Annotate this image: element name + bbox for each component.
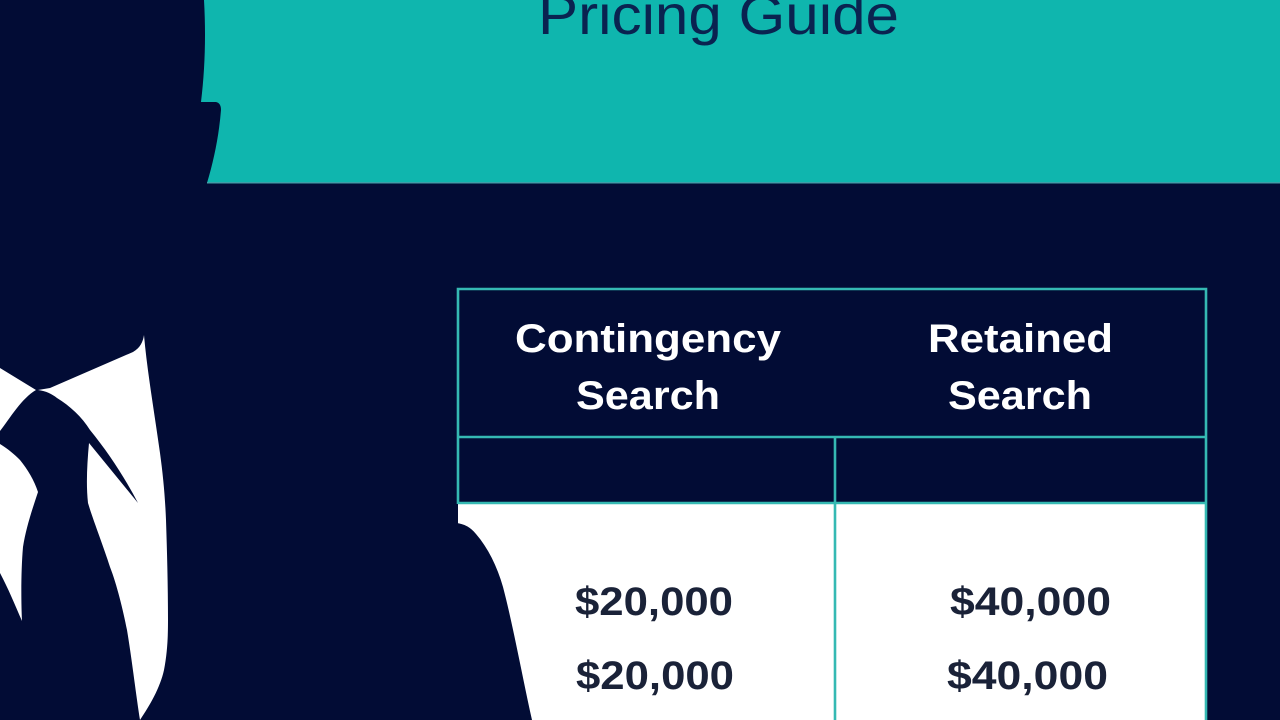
silhouette shoulder over table xyxy=(440,523,532,720)
retained prices xyxy=(947,580,1111,698)
retained prices: $40,000 xyxy=(950,580,1111,624)
businessman shirt and tie xyxy=(0,335,168,720)
shirt right side xyxy=(38,335,168,720)
column header: contingency search xyxy=(515,317,782,418)
column header: contingency search: Search xyxy=(576,374,720,418)
pricing table xyxy=(458,289,1206,720)
table body white cells xyxy=(458,504,1206,720)
contingency prices: $20,000 xyxy=(576,654,734,698)
contingency prices xyxy=(575,580,734,698)
contingency prices: $20,000 xyxy=(575,580,733,624)
column header: contingency search: Contingency xyxy=(515,317,782,361)
header band xyxy=(201,0,1280,184)
shirt left side xyxy=(0,444,38,621)
column header: retained search: Retained xyxy=(928,317,1113,361)
column header: retained search: Search xyxy=(948,374,1092,418)
retained prices: $40,000 xyxy=(947,654,1108,698)
table grid lines xyxy=(458,289,1206,720)
collar left xyxy=(0,368,36,431)
column header: retained search xyxy=(928,317,1113,418)
